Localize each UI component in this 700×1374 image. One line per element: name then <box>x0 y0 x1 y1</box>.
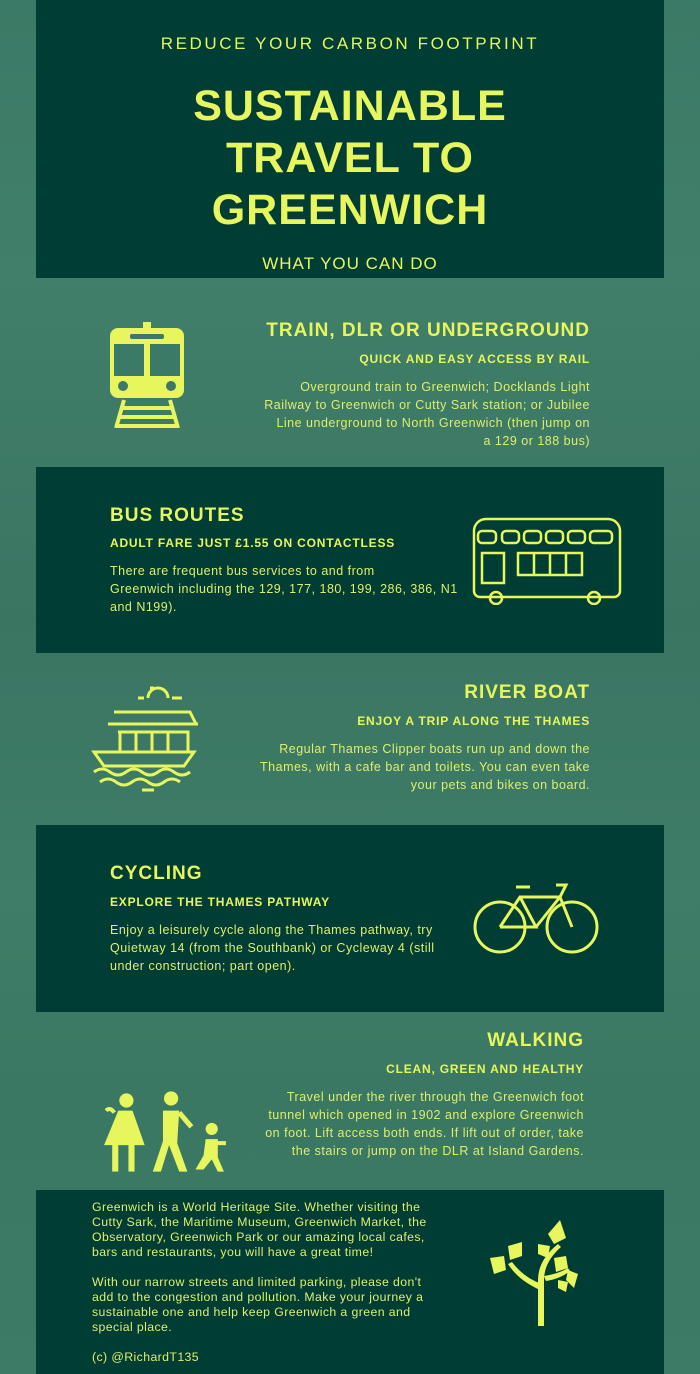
title: TRAVEL TO <box>226 134 474 182</box>
text block: EXPLORE THE THAMES PATHWAY <box>110 895 330 909</box>
text block: TRAIN, DLR OR UNDERGROUND <box>266 320 590 341</box>
icon: bus <box>472 518 622 605</box>
text block: Travel under the river through the Greenwich foot <box>287 1090 584 1104</box>
icon: boat <box>91 686 198 792</box>
text block: under construction; part open). <box>110 959 296 973</box>
text block <box>110 863 435 973</box>
text block <box>265 1030 584 1158</box>
text block: Thames, with a cafe bar and toilets. You can even take <box>260 760 590 774</box>
text block: ADULT FARE JUST £1.55 ON CONTACTLESS <box>110 536 395 550</box>
text block: Greenwich including the 129, 177, 180, 199, 286, 386, N1 <box>110 582 458 596</box>
text block: With our narrow streets and limited parking, please don't <box>92 1275 421 1289</box>
text block: Quietway 14 (from the Southbank) or Cycleway 4 (still <box>110 941 435 955</box>
text block: Railway to Greenwich or Cutty Sark station; or Jubilee <box>264 398 590 412</box>
text block: sustainable one and help keep Greenwich a green and <box>92 1305 410 1319</box>
text block: your pets and bikes on board. <box>411 778 590 792</box>
text block: Regular Thames Clipper boats run up and down the <box>279 742 590 756</box>
text block: tunnel which opened in 1902 and explore Greenwich <box>268 1108 584 1122</box>
text block: special place. <box>92 1320 172 1334</box>
text block: Greenwich is a World Heritage Site. Whether visiting the <box>92 1200 420 1214</box>
title <box>193 82 507 234</box>
text block: WALKING <box>487 1030 584 1051</box>
text block: on foot. Lift access both ends. If lift out of order, take <box>265 1126 584 1140</box>
text block: Cutty Sark, the Maritime Museum, Greenwich Market, the <box>92 1215 427 1229</box>
text block: a 129 or 188 bus) <box>484 434 590 448</box>
text block: Enjoy a leisurely cycle along the Thames pathway, try <box>110 923 433 937</box>
icon: train <box>110 322 184 428</box>
text block: CYCLING <box>110 863 202 884</box>
icon: tree <box>490 1220 578 1326</box>
panel: cycling <box>36 825 664 1012</box>
title: GREENWICH <box>212 186 488 234</box>
section: river boat <box>91 682 590 792</box>
text block: and N199). <box>110 600 177 614</box>
text block <box>110 505 458 614</box>
icon: bicycle <box>474 884 598 954</box>
text block: BUS ROUTES <box>110 505 245 526</box>
text block: RIVER BOAT <box>464 682 590 703</box>
text block: bars and restaurants, you will have a great time! <box>92 1245 373 1259</box>
icon: family walking <box>104 1091 226 1172</box>
text block <box>92 1200 427 1364</box>
panel: footer <box>36 1190 664 1374</box>
text block: Line underground to North Greenwich (then jump on <box>276 416 590 430</box>
header panel <box>36 0 664 278</box>
text block: QUICK AND EASY ACCESS BY RAIL <box>359 352 590 366</box>
text block: (c) @RichardT135 <box>92 1350 199 1364</box>
text block: add to the congestion and pollution. Make your journey a <box>92 1290 423 1304</box>
subtitle: WHAT YOU CAN DO <box>262 254 438 273</box>
text block: the stairs or jump on the DLR at Island Gardens. <box>292 1144 584 1158</box>
title: SUSTAINABLE <box>193 82 507 130</box>
text block: ENJOY A TRIP ALONG THE THAMES <box>357 714 590 728</box>
panel: bus <box>36 467 664 653</box>
text block: There are frequent bus services to and from <box>110 564 375 578</box>
text block <box>264 320 590 448</box>
text block: CLEAN, GREEN AND HEALTHY <box>386 1062 584 1076</box>
text block: Overground train to Greenwich; Docklands Light <box>300 380 590 394</box>
section: walking <box>104 1030 584 1172</box>
text block: Observatory, Greenwich Park or our amazing local cafes, <box>92 1230 425 1244</box>
kicker: REDUCE YOUR CARBON FOOTPRINT <box>161 34 539 53</box>
text block <box>260 682 590 792</box>
section: train <box>110 320 590 448</box>
